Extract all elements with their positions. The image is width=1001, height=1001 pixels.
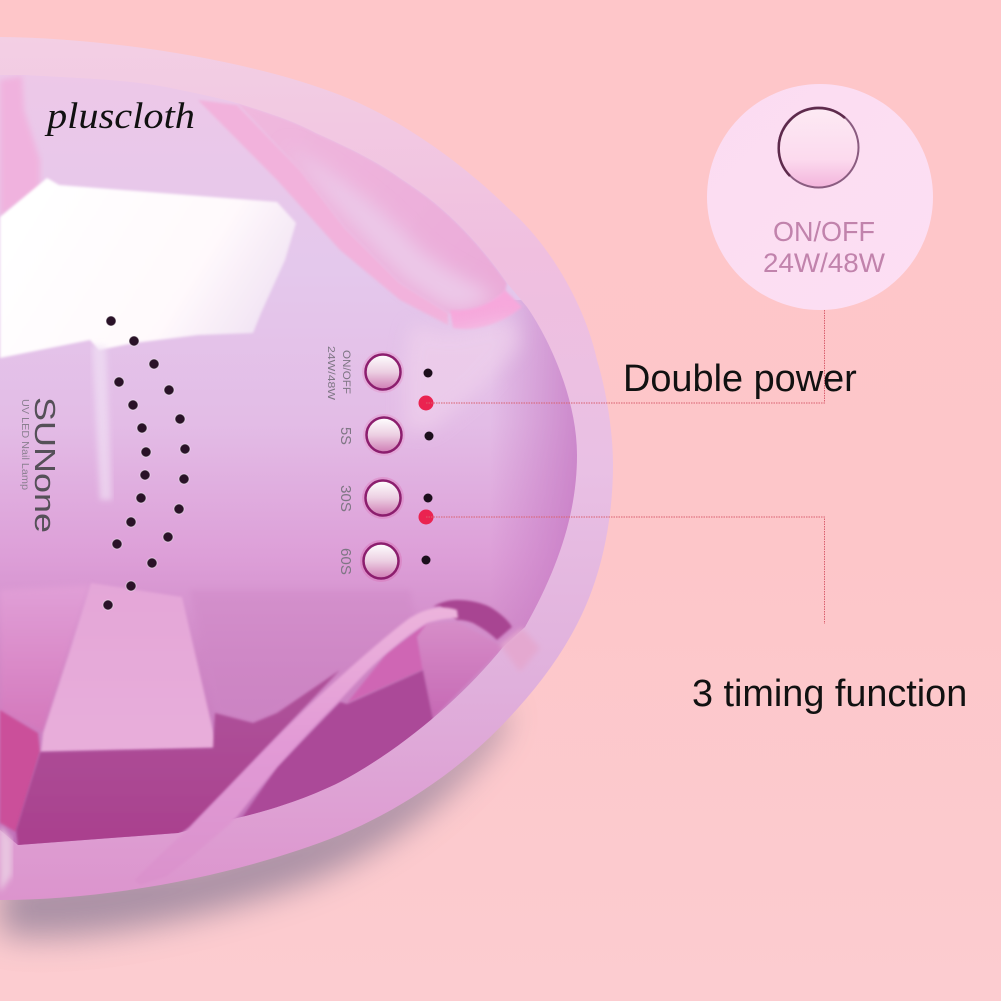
callout: on/off button detail [707,84,933,310]
brand name: SUNone [28,397,60,533]
button: 30s [362,477,404,519]
panel: nail lamp [0,37,613,900]
upper dark arch [433,600,512,640]
crescent highlight [305,162,491,311]
label 5s: 5S [337,427,354,445]
button labels [325,346,354,575]
button: 5s [363,414,405,456]
indicator dots [422,368,434,564]
label 30s: 30S [337,485,354,512]
crescent hot pink joint [450,290,522,329]
lower curved ribbon [134,608,458,885]
detail button [778,108,858,188]
lower left pale patch [41,583,217,752]
button: on/off [362,351,404,393]
detail wattage: 24W/48W [763,248,886,278]
lamp shadow [0,707,506,937]
label on/off: ON/OFF [340,350,352,394]
lower left mauve panel [2,592,82,729]
lower left magenta panel [0,710,40,832]
heading: double power: Double power [623,358,857,400]
centre pale band [92,345,112,500]
watermark: pluscloth [44,96,195,137]
right side shade [503,300,577,626]
lower left dark panel [16,670,340,847]
rim joint bottom left [0,825,12,892]
vent dots [103,316,190,610]
detail label: ON/OFF [773,216,875,247]
detail circle [707,84,933,310]
button: 60s [360,540,402,582]
lower body tone [190,590,420,723]
top right crescent [237,103,507,313]
heading: timing function: 3 timing function [692,673,967,715]
lamp inner body [0,60,600,860]
lamp outer shell [0,37,613,900]
label wattage: 24W/48W [325,346,337,400]
rim joint bottom right [500,628,540,672]
brand subtitle: UV LED Nail Lamp [19,399,30,490]
label: SUNone brand [19,397,60,533]
label 60s: 60S [337,548,354,575]
white highlight [0,178,296,358]
left pink strip [0,76,40,218]
leader line: timing [418,510,824,624]
crescent ribbon [198,100,448,325]
right pale zone [405,318,520,430]
leader line: double power [418,310,824,410]
lower right mid panel [347,623,427,703]
lower right dark panel [237,670,440,825]
lower right pale panel [422,653,493,717]
